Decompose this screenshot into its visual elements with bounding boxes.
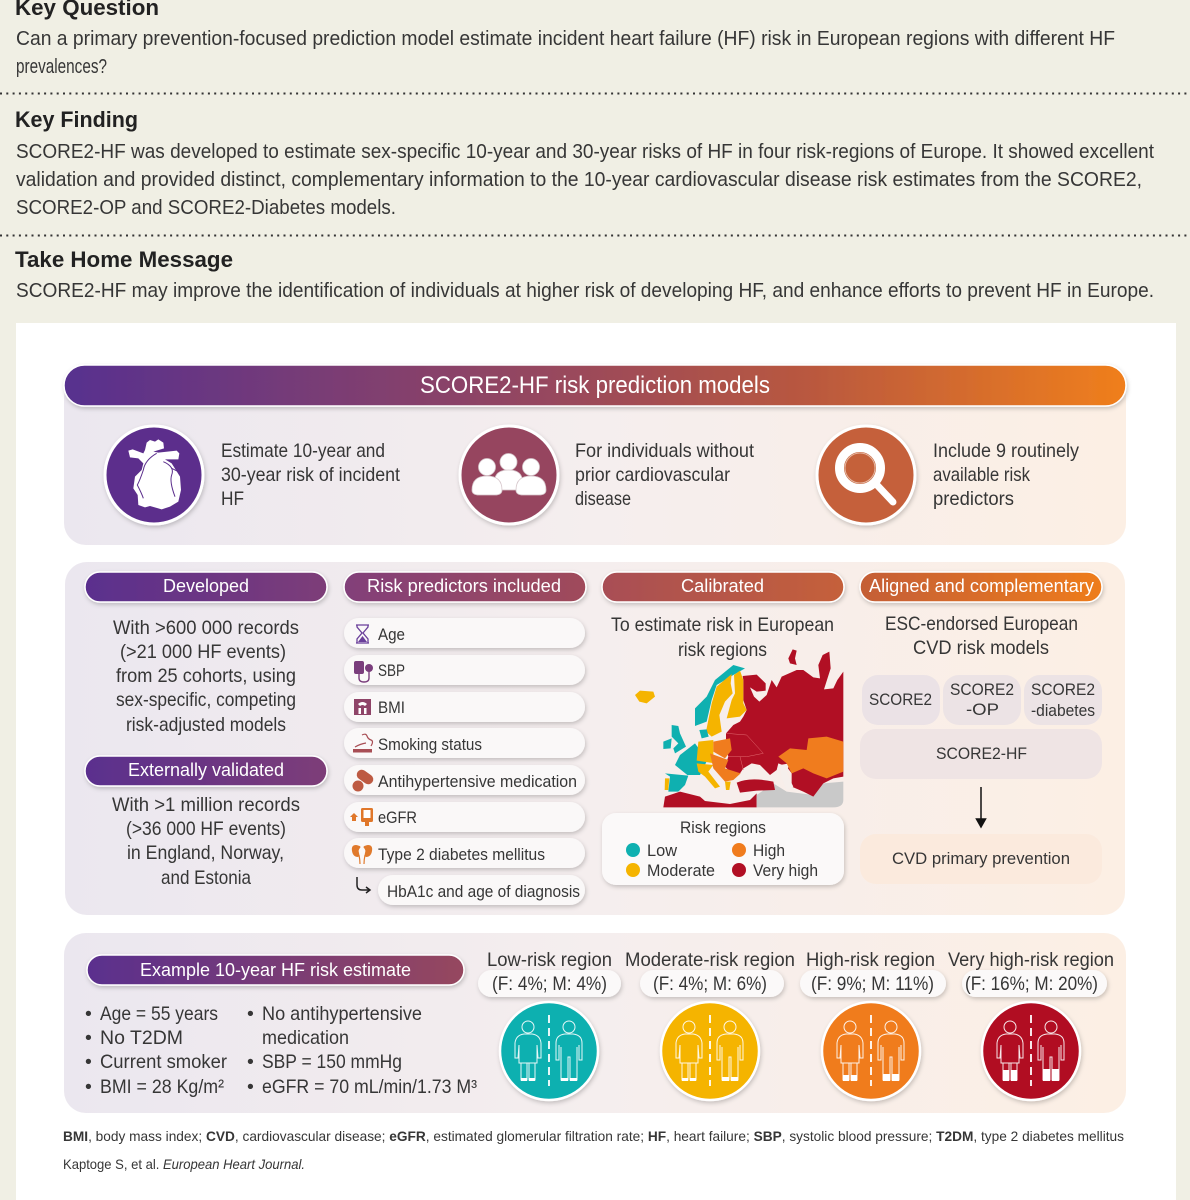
pill: developed	[85, 572, 327, 602]
region: very high risk	[948, 949, 1114, 1100]
list: example profile left	[85, 1003, 227, 1098]
region: moderate risk	[625, 949, 795, 1100]
pill: risk predictors included: Risk predictors included	[367, 576, 561, 596]
pill: example heading: Example 10-year HF risk estimate	[140, 960, 411, 980]
list: example profile left: •	[85, 1027, 92, 1049]
box: SCORE2	[862, 675, 940, 725]
list: example profile right	[247, 1003, 477, 1098]
text: without prior CVD: For individuals without	[575, 440, 755, 462]
list: example profile left: BMI = 28 Kg/m²	[100, 1076, 224, 1098]
footnote: abbreviations: BMI, body mass index; CVD, cardiovascular disease; eGFR, estimated glomerular filtration rate; HF, heart failure; SBP, systolic blood pressure; T2DM, type 2 diabetes mellitus	[63, 1128, 1124, 1144]
column: calibrated	[602, 572, 844, 885]
legend: risk regions: Moderate	[647, 861, 715, 880]
text: estimate risk: 30-year risk of incident	[221, 464, 401, 486]
column: risk predictors	[344, 572, 586, 905]
list: example profile left: Age = 55 years	[100, 1003, 218, 1025]
pill: calibrated	[602, 572, 844, 602]
box: SCORE2-diabetes	[1024, 675, 1102, 725]
panel: SCORE2-HF risk prediction models	[64, 365, 1126, 545]
pill: externally validated: Externally validated	[128, 760, 284, 780]
pill: aligned and complementary	[860, 572, 1102, 602]
icon: heart	[105, 426, 203, 524]
text: validation details	[112, 794, 300, 889]
predictor: type 2 diabetes mellitus	[344, 838, 585, 868]
box: SCORE2-diabetes: SCORE2	[1031, 680, 1095, 699]
pill: calibrated: Calibrated	[681, 576, 764, 596]
box: SCORE2-HF	[860, 729, 1102, 779]
predictor: type 2 diabetes mellitus: Type 2 diabetes mellitus	[378, 845, 545, 864]
region: low risk: Low-risk region	[487, 949, 612, 971]
list: example profile right: •	[247, 1051, 254, 1073]
region: high risk: (F: 9%; M: 11%)	[811, 973, 934, 995]
region: very high risk: (F: 16%; M: 20%)	[965, 973, 1098, 995]
text: key question body: prevalences?	[16, 55, 107, 78]
region: moderate risk: Moderate-risk region	[625, 949, 795, 971]
legend: risk regions: Very high	[753, 861, 818, 880]
predictor: SBP: SBP	[378, 661, 405, 680]
text: development details: risk-adjusted models	[126, 714, 286, 736]
region: low risk: (F: 4%; M: 4%)	[492, 973, 607, 995]
heading: key finding: Key Finding	[15, 107, 138, 132]
list: example profile left: No T2DM	[100, 1027, 183, 1049]
text: nine predictors: Include 9 routinely	[933, 440, 1079, 462]
white figure panel	[16, 323, 1176, 1200]
text: development details: from 25 cohorts, using	[116, 665, 296, 687]
list: example profile right: SBP = 150 mmHg	[262, 1051, 402, 1073]
predictor: BMI: BMI	[378, 698, 405, 717]
banner heading	[64, 365, 1126, 406]
predictor: SBP	[344, 655, 585, 685]
list: example profile left: •	[85, 1051, 92, 1073]
predictor: eGFR	[344, 802, 585, 832]
predictor: smoking status: Smoking status	[378, 735, 482, 754]
text: key question body: Can a primary prevention-focused prediction model estimate incident heart failure (HF) risk in European regions with different HF	[16, 27, 1115, 50]
list: example profile right: •	[247, 1003, 254, 1025]
list: example profile right: medication	[262, 1027, 349, 1049]
text: development details: sex-specific, competing	[116, 689, 296, 711]
text: without prior CVD	[575, 440, 755, 510]
region: very high risk: Very high-risk region	[948, 949, 1114, 971]
list: example profile right: eGFR = 70 mL/min/1.73 M³	[262, 1076, 477, 1098]
text: nine predictors: predictors	[933, 488, 1014, 510]
text: without prior CVD: disease	[575, 488, 631, 510]
predictor: smoking status	[344, 728, 585, 758]
region: low risk	[478, 949, 621, 1100]
predictor: antihypertensive medication: Antihypertensive medication	[378, 772, 577, 791]
predictor: age: Age	[378, 625, 405, 644]
box: SCORE2-diabetes: -diabetes	[1031, 701, 1095, 720]
map: European risk regions	[635, 649, 843, 807]
heading: take home message: Take Home Message	[15, 247, 233, 272]
text: nine predictors: available risk	[933, 464, 1030, 486]
predictor: HbA1c and age of diagnosis: HbA1c and age of diagnosis	[387, 882, 580, 901]
region: high risk: High-risk region	[806, 949, 935, 971]
predictor: antihypertensive medication	[344, 765, 585, 795]
predictor: HbA1c and age of diagnosis	[378, 875, 585, 905]
box: CVD primary prevention	[860, 834, 1102, 884]
panel: example risk estimate	[64, 933, 1126, 1113]
text: nine predictors	[933, 440, 1079, 510]
arrow: to prevention	[976, 787, 986, 827]
column: developed	[85, 572, 327, 889]
box: CVD primary prevention: CVD primary prevention	[892, 849, 1070, 868]
text: validation details: and Estonia	[161, 867, 251, 889]
list: example profile left: •	[85, 1076, 92, 1098]
text: without prior CVD: prior cardiovascular	[575, 464, 730, 486]
text: validation details: (>36 000 HF events)	[126, 818, 286, 840]
pill: developed: Developed	[163, 576, 249, 596]
box: SCORE2: SCORE2	[869, 690, 932, 709]
box: SCORE2-HF: SCORE2-HF	[936, 744, 1027, 763]
text: key finding body	[16, 140, 1154, 219]
text: calibration description	[611, 614, 834, 661]
legend: risk regions	[602, 813, 844, 885]
legend: risk regions: Low	[647, 841, 678, 860]
list: example profile left: Current smoker	[100, 1051, 227, 1073]
section: key question	[15, 0, 1115, 78]
text: key finding body: validation and provided distinct, complementary information to the 10-year cardiovascular disease risk estimates from the SCORE2,	[16, 168, 1142, 191]
text: calibration description: risk regions	[678, 639, 767, 661]
predictor: age	[344, 618, 585, 648]
text: key finding body: SCORE2-OP and SCORE2-Diabetes models.	[16, 196, 396, 219]
list: example profile left: •	[85, 1003, 92, 1025]
icon: magnifying glass	[817, 426, 915, 524]
box: SCORE2-OP: SCORE2	[950, 680, 1014, 699]
legend: risk regions: Risk regions	[680, 818, 766, 837]
predictor: eGFR: eGFR	[378, 808, 417, 827]
region: high risk	[800, 949, 946, 1100]
text: estimate risk: HF	[221, 488, 244, 510]
predictor: BMI	[344, 692, 585, 722]
text: estimate risk: Estimate 10-year and	[221, 440, 385, 462]
text: validation details: With >1 million records	[112, 794, 300, 816]
text: ESC-endorsed models: CVD risk models	[913, 637, 1049, 659]
column: aligned and complementary	[860, 572, 1102, 884]
region: moderate risk: (F: 4%; M: 6%)	[653, 973, 767, 995]
footnote: citation: Kaptoge S, et al. European Heart Journal.	[63, 1156, 305, 1172]
pill: example heading	[87, 955, 464, 985]
text: development details: (>21 000 HF events)	[120, 641, 286, 663]
text: calibration description: To estimate risk in European	[611, 614, 834, 636]
section: key finding	[15, 107, 1154, 219]
text: validation details: in England, Norway,	[127, 842, 284, 864]
box: SCORE2-OP: -OP	[966, 700, 999, 719]
arrow: sub-predictor	[357, 877, 370, 893]
pill: aligned and complementary: Aligned and complementary	[869, 576, 1094, 596]
banner heading: SCORE2-HF risk prediction models	[420, 372, 770, 399]
pill: externally validated	[85, 756, 327, 786]
text: development details: With >600 000 records	[113, 617, 299, 639]
list: example profile right: No antihypertensive	[262, 1003, 422, 1025]
text: development details	[113, 617, 299, 736]
text: ESC-endorsed models	[885, 613, 1078, 659]
text: key question body	[16, 27, 1115, 78]
icon: people	[460, 426, 558, 524]
section: take home message	[15, 247, 1154, 302]
panel: model details	[65, 562, 1125, 915]
box: SCORE2-OP	[943, 675, 1021, 725]
text: estimate risk	[221, 440, 401, 510]
text: ESC-endorsed models: ESC-endorsed European	[885, 613, 1078, 635]
legend: risk regions: High	[753, 841, 785, 860]
pill: risk predictors included	[344, 572, 586, 602]
list: example profile right: •	[247, 1076, 254, 1098]
